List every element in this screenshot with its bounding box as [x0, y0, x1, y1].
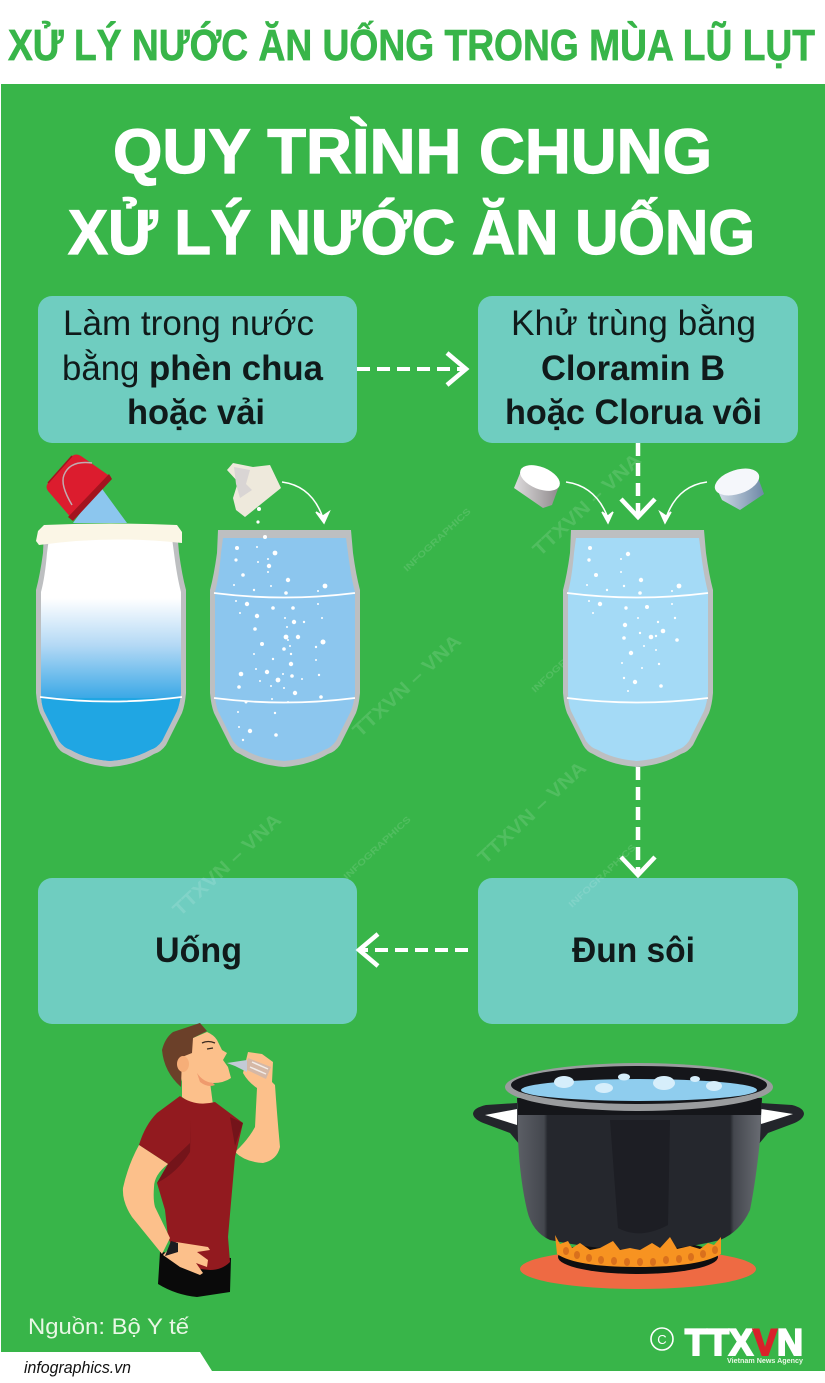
curved arrow: right tablet	[660, 482, 707, 523]
icon: left tablet	[514, 460, 564, 508]
shirt	[139, 1096, 243, 1270]
watermarks: INFOGRAPHICS	[342, 814, 413, 881]
arrow: boil to drink	[359, 934, 468, 966]
watermarks: TTXVN – VNA	[474, 758, 591, 869]
watermarks: INFOGRAPHICS	[567, 842, 638, 909]
illustration: boiling pot	[473, 1063, 804, 1289]
icon: alum chunk	[227, 463, 281, 524]
hair	[162, 1023, 207, 1087]
burner glow	[520, 1249, 756, 1289]
step box: boil: Đun sôi	[572, 931, 695, 970]
neck	[182, 1075, 213, 1106]
website label: infographics.vn	[24, 1358, 131, 1377]
arrow: barrel to boil	[621, 767, 655, 875]
cloth cover	[36, 524, 182, 545]
arrow: disinfect to barrel	[621, 443, 655, 517]
step box: disinfect: Khử trùng bằng	[511, 304, 756, 343]
watermarks	[169, 450, 646, 921]
step box: drink	[38, 878, 357, 1024]
logo: TTXVN: Vietnam News Agency	[727, 1358, 803, 1365]
bubbles	[554, 1074, 722, 1093]
arrow: clarify to disinfect	[357, 353, 466, 385]
water	[521, 1079, 757, 1101]
flames	[555, 1235, 721, 1267]
handles	[473, 1103, 520, 1145]
logo: TTXVN: C	[657, 1332, 667, 1347]
watermarks: TTXVN – VNA	[529, 450, 646, 561]
watermarks: TTXVN – VNA	[169, 810, 286, 921]
watermarks: TTXVN – VNA	[349, 631, 466, 742]
burner base	[558, 1240, 718, 1274]
main heading: QUY TRÌNH CHUNG	[113, 117, 712, 187]
jaw shadow	[197, 1073, 215, 1086]
icon: right tablet	[711, 463, 764, 510]
raised arm and hand	[235, 1052, 280, 1163]
logo: TTXVN: TTXVN	[685, 1322, 803, 1363]
step box: disinfect: Cloramin B	[541, 349, 725, 388]
curved arrow into barrel	[282, 482, 329, 523]
step box: clarify water	[38, 296, 357, 443]
footer tab	[0, 1352, 825, 1383]
illustration: man drinking water	[123, 1023, 280, 1297]
dissolving dots	[586, 546, 681, 692]
step box: clarify water: bằng phèn chua	[62, 349, 324, 388]
lowered arm	[123, 1145, 170, 1254]
icon: bucket pouring water	[46, 454, 127, 523]
watermarks: INFOGRAPHICS	[530, 627, 601, 694]
sediment dots	[233, 535, 327, 741]
main heading: XỬ LÝ NƯỚC ĂN UỐNG	[68, 197, 755, 268]
source: Nguồn: Bộ Y tế	[28, 1314, 190, 1339]
step box: disinfect: hoặc Clorua vôi	[505, 393, 762, 432]
hand on hip	[163, 1242, 210, 1275]
face	[178, 1032, 231, 1085]
curved arrow: left tablet	[566, 482, 613, 523]
step box: clarify water: Làm trong nước	[63, 304, 314, 343]
step box: boil	[478, 878, 798, 1024]
watch	[165, 1241, 178, 1256]
step box: disinfect	[478, 296, 798, 443]
flame droplets	[563, 1246, 718, 1266]
ear	[177, 1056, 189, 1072]
barrel with disinfectant	[563, 530, 713, 767]
step box: drink: Uống	[155, 931, 242, 970]
brow and eye	[202, 1042, 215, 1049]
barrel with settling water	[36, 524, 186, 768]
rim	[505, 1063, 773, 1111]
pot body	[517, 1098, 762, 1250]
watermarks: INFOGRAPHICS	[402, 506, 473, 573]
main heading	[68, 117, 755, 268]
barrel with alum	[210, 530, 360, 767]
shorts	[158, 1252, 231, 1297]
step box: clarify water: hoặc vải	[127, 393, 265, 432]
glass	[245, 1058, 271, 1079]
